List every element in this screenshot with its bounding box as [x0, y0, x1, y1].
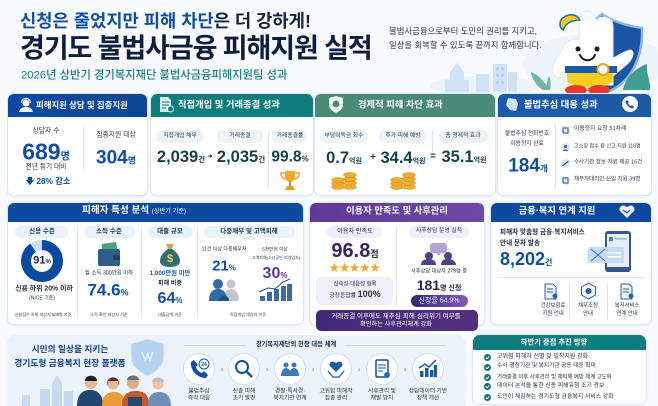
panel header: [8, 203, 303, 222]
icon: insurance document: [544, 283, 558, 300]
panel: finance welfare: [490, 202, 652, 325]
pill: satisfaction: [327, 226, 382, 238]
text: step 4: [320, 388, 352, 403]
icon: shield won: [329, 96, 343, 113]
text: platform tagline: 시민의 일상을 지키는: [32, 344, 108, 354]
text: priority 2: 수사·행정기관 및 복지기관 공동 대응 확대: [497, 363, 596, 369]
text: debt adjustment: [578, 302, 598, 318]
text: multi debt: 다중채무 및 고액피해: [220, 228, 278, 235]
text: footnote: 직접개입 대상자 기준: [230, 312, 266, 317]
icon: wallet: [98, 242, 120, 266]
operator plus: +: [370, 152, 376, 163]
text: income: 소득 수준: [96, 228, 122, 235]
pill: multi debt: [204, 226, 295, 238]
callout: aftercare: [316, 310, 478, 331]
text: health insurance: 건강보험료: [541, 303, 565, 309]
icon: item 2: [561, 143, 570, 152]
icon: check: [484, 364, 491, 370]
icon: platform shield: [131, 339, 164, 376]
pill: closing rate: [272, 130, 307, 143]
text: step 5: 재발 방지: [371, 396, 393, 402]
text: welfare service: [615, 302, 639, 318]
text: step 5: [368, 388, 396, 403]
header text: 직접개입 및 거래종결 성과: [178, 99, 280, 109]
icon: counselling people: [421, 243, 456, 265]
illustration: mascot with shield: [531, 11, 650, 93]
title: 경기도 불법사금융 피해지원 실적: [20, 33, 372, 63]
step: aftercare: [366, 353, 398, 403]
text: under 10M: 1,000만원 미만: [150, 270, 190, 277]
text: callout line 1: 거래종결 이후에도 재추심·피해·심리위기 여부를: [331, 312, 461, 319]
intro text: 일상을 회복할 수 있도록 끝까지 함께합니다.: [389, 40, 542, 50]
pill: credit: [15, 226, 69, 238]
header text: 경제적 피해 차단 효과: [358, 99, 443, 109]
text: priority 5: 도민이 체감하는 경기도형 금융복지 서비스 강화: [497, 394, 614, 400]
icon: debt adjustment: [581, 283, 596, 299]
icon: headset agent: [19, 98, 33, 112]
text: comparison: 전년 동기 대비: [26, 164, 66, 171]
arrow: ›: [404, 366, 406, 374]
text: step 1: 즉각 대응: [188, 396, 210, 402]
icon: magnifier: [228, 353, 260, 385]
pill: aftercare: [409, 226, 469, 238]
panel: second half priorities: [472, 334, 647, 405]
stat: 689: 689명: [22, 138, 70, 164]
text: priority 1: 고위험 피해자 선별 및 밀착지원 강화: [497, 354, 588, 360]
panel: direct intervention: [150, 93, 314, 196]
text: phone numbers suspended: 이용정지 완료: [510, 141, 544, 147]
list: priorities: [484, 352, 644, 402]
stat: 2,035: 2,035건: [217, 148, 265, 166]
text: step 1: 불법추심: [189, 388, 209, 394]
text: footnote: 신용점수 하위 대상자 608명 기준: [15, 312, 71, 317]
text: step 4: 고위험 피해자: [320, 388, 352, 394]
text: welfare service: 복지서비스: [615, 303, 639, 309]
panel header: [310, 203, 484, 222]
stat: 35.1: 35.1억원: [441, 148, 487, 166]
header text: 불법추심 대응 성과: [524, 99, 598, 109]
panel header: [315, 94, 495, 117]
stat: 74.6: 74.6%: [87, 280, 129, 299]
icon: five stars: ★★★★★: [329, 262, 380, 274]
subtitle: 2026년 상반기 경기복지재단 불법사금융피해지원팀 성과: [21, 69, 287, 81]
text: customized guide: [500, 226, 585, 248]
icon: money bag: $: [167, 253, 173, 265]
step: immediate response: [183, 353, 215, 403]
text: aftercare: 사후상담 운영 실적: [416, 228, 462, 234]
text: health insurance: [541, 302, 565, 318]
heading: priorities: 하반기 중점 추진 방향: [521, 337, 587, 346]
text: application rate: 신청률 64.9%: [418, 298, 460, 304]
illustration: city: [20, 375, 75, 406]
text: counsel count label: 상담자 수: [33, 128, 59, 135]
arrow: ›: [358, 366, 360, 374]
text: intensive label: 집중지원 대상: [96, 131, 136, 138]
header text: 피해지원 상담 및 집중지원: [36, 99, 128, 109]
illustration: phone and envelope: [588, 231, 632, 273]
text: item 4: 채무자대리인 선임 지원 39명: [574, 176, 640, 182]
heading: victim profile: 피해자 특성 분석 (상반기 기준): [82, 205, 186, 216]
text: footnote: 소득 확인 대상자 기준: [90, 312, 128, 317]
stat: 91: 91%: [33, 254, 51, 266]
icon: map: [506, 98, 518, 111]
text: aftercare target: 사후상담 대상자 279명 중: [411, 268, 467, 274]
pill: income: [84, 226, 135, 238]
pill: intervention debt: [156, 130, 204, 143]
stat: decrease: 🡇 28% 감소: [25, 176, 71, 186]
heading: top line: 신청은 줄었지만 피해 차단은 더 강하게!: [20, 11, 311, 31]
icon: welfare document: [620, 283, 634, 300]
text: large loss detail: 고액피해(소상공인·미영업자): [252, 255, 300, 260]
text: welfare service: 연계 안내: [616, 311, 638, 317]
stat: 2,039: 2,039건: [157, 148, 205, 166]
icon: money bag: [160, 244, 180, 267]
panel: platform: [7, 335, 466, 406]
text: fairness line 1: 신속성·대응성 항목: [334, 281, 376, 287]
stat: 96.8: 96.8점: [331, 240, 379, 262]
text: step 6: 상담데이터 기반: [409, 388, 447, 394]
stat: 30: 30%: [263, 265, 287, 282]
text: loan: 대출 규모: [157, 228, 183, 235]
intro text: 불법사금융으로부터 도민의 권리를 지키고,: [389, 26, 537, 36]
text: large loss: 5천만원 이상: [262, 247, 288, 252]
text: phone numbers suspended: [505, 130, 549, 147]
icon: coins: [390, 172, 416, 190]
list: response details: [561, 125, 642, 185]
text: step 3: 복지기관 연계: [274, 396, 306, 402]
heading: finance welfare: 금융·복지 연계 지원: [519, 205, 595, 215]
icon: heart hands: [320, 353, 352, 385]
text: step 1: [188, 388, 210, 403]
text: satisfaction: 이용자 만족도: [337, 228, 373, 235]
text: priority 4: 데이터 분석을 통한 신종 피해유형 조기 경보: [497, 383, 604, 389]
panel: economic effect: [314, 93, 496, 196]
text: total: 총 경제적 효과: [445, 133, 481, 139]
heading: response system: 경기복지재단의 현장 대응 체계: [256, 341, 336, 348]
stat: 34.4: 34.4억원: [380, 149, 426, 167]
icon: check: [484, 394, 491, 400]
text: debt adjustment: 안내: [583, 311, 593, 317]
text: step 3: 경찰·특사경·: [275, 388, 305, 394]
text: phone numbers suspended: 불법추심 전화번호: [505, 131, 549, 137]
intro text: [389, 26, 542, 50]
text: step 3: [274, 388, 306, 403]
stat: 304: 304명: [96, 148, 136, 168]
stat: 181: 181명 신청: [417, 277, 461, 293]
heading: satisfaction: 이용자 만족도 및 사후관리: [346, 205, 448, 215]
arrow: ➜: [207, 154, 213, 160]
text: step 6: 정책 개선: [417, 396, 439, 402]
text: item 1: 이용정지 요청 51차례: [574, 126, 626, 132]
pill: recovered: [320, 130, 368, 143]
stat: 184: 184개: [508, 156, 548, 176]
panel: victim profile: [7, 202, 304, 325]
step: early detection: [228, 353, 260, 403]
text: callout line 2: 확인하는 사후관리체계 강화: [360, 321, 432, 328]
step: intensive care: [320, 353, 352, 403]
icon: item 3: [561, 159, 570, 168]
chart: credit donut: [21, 240, 63, 282]
text: step 4: 집중 관리: [325, 396, 347, 402]
icon: agency people: [274, 353, 306, 385]
box: response fairness: [316, 277, 393, 305]
stat: 0.7: 0.7억원: [326, 149, 362, 167]
panel header: [151, 94, 313, 117]
icon: handshake: [619, 205, 635, 218]
text: debt adjustment: 채무조정: [578, 303, 598, 309]
stat: 64: 64%: [158, 290, 182, 307]
panel header: [491, 203, 651, 222]
pill: closed: [217, 130, 263, 143]
icon: coins: [331, 172, 357, 190]
text: platform tagline: [14, 342, 126, 370]
text: footnote: 대출금액 기준: [158, 312, 182, 317]
text: closing rate: 거래종결률: [277, 133, 303, 139]
text: step 2: 신종 피해: [233, 388, 255, 394]
icon: check: [484, 383, 491, 390]
stat: 21: 21%: [212, 257, 236, 274]
step: agency link: [274, 353, 306, 403]
text: damage share: 피해 비중: [158, 280, 182, 286]
text: multi-debtors: 11건 이상 다중채무자: [202, 246, 246, 252]
text: step 6: [409, 388, 447, 403]
text: prevented: 추가 피해 예방: [385, 133, 421, 139]
icon: item 4: [561, 176, 570, 185]
arrow: ›: [312, 366, 314, 374]
text: item 2: 고소장 접수 등 신고 지원 116명: [574, 143, 641, 149]
text: step 2: [233, 388, 255, 403]
icon: growth chart: [412, 353, 444, 385]
text: step 5: 사후관리 및: [368, 388, 396, 394]
text: closed: 거래종결: [229, 133, 251, 139]
text: monthly income: 월 소득 300만원 이하: [85, 270, 133, 276]
text: recovered: 부당이득금 회수: [325, 133, 363, 139]
text: fairness line 2: 긍정응답률 100%: [329, 289, 381, 299]
icon: people: [209, 279, 239, 301]
icon: document: [160, 97, 174, 112]
pill: prevented: [379, 130, 427, 143]
pill: application rate: [411, 295, 468, 307]
icon: phone badge: [622, 96, 638, 112]
illustration: citizens: [77, 372, 173, 406]
panel: satisfaction: [309, 202, 485, 326]
icon: check: [484, 354, 491, 360]
text: credit: 신용 수준: [29, 228, 55, 235]
stat: 8,202: 8,202건: [500, 249, 552, 269]
text: customized guide: 안내 문자 발송: [500, 240, 540, 246]
icon: item 1: [561, 126, 570, 135]
step: policy: [412, 353, 444, 403]
panel header: [8, 94, 147, 117]
pill: loan: [148, 226, 193, 238]
background watercolor wash and city: [430, 35, 658, 96]
text: customized guide: 피해자 맞춤형 금융·복지서비스: [500, 228, 585, 236]
text: bottom 20: 신용 하위 20% 이하: [15, 285, 73, 292]
icon: 24h phone: 24: [201, 362, 207, 368]
text: intervention debt: 직접개입 채무: [163, 133, 197, 139]
panel header: [498, 94, 651, 117]
panel header: [473, 335, 646, 350]
text: platform tagline: 경기도형 금융복지 현장 플랫폼: [14, 358, 126, 368]
icon: checklist: [366, 353, 398, 385]
panel: counselling: [7, 93, 148, 196]
text: health insurance: 지원 안내: [542, 311, 564, 317]
text: item 3: 수사기관 정보·자료 제공 16건: [574, 159, 642, 165]
icon: 24h phone: [183, 353, 215, 385]
operator equals: =: [430, 151, 436, 162]
arrow: ›: [221, 366, 223, 374]
text: priority 3: 거래종결 이후 사후관리 및 재피해 예방 체계 고도화: [497, 374, 612, 380]
arrow: ›: [266, 366, 268, 374]
pill: total: [439, 130, 488, 143]
chart: rising bars: [258, 278, 292, 301]
panel: illegal collection response: [497, 93, 652, 196]
stat: 99.8: 99.8%: [271, 148, 309, 165]
icon: check: [484, 374, 491, 380]
text: step 2: 조기 발견: [233, 396, 255, 402]
icon: trophy: [280, 171, 300, 190]
text: NICE: (NICE 기준): [29, 296, 55, 302]
